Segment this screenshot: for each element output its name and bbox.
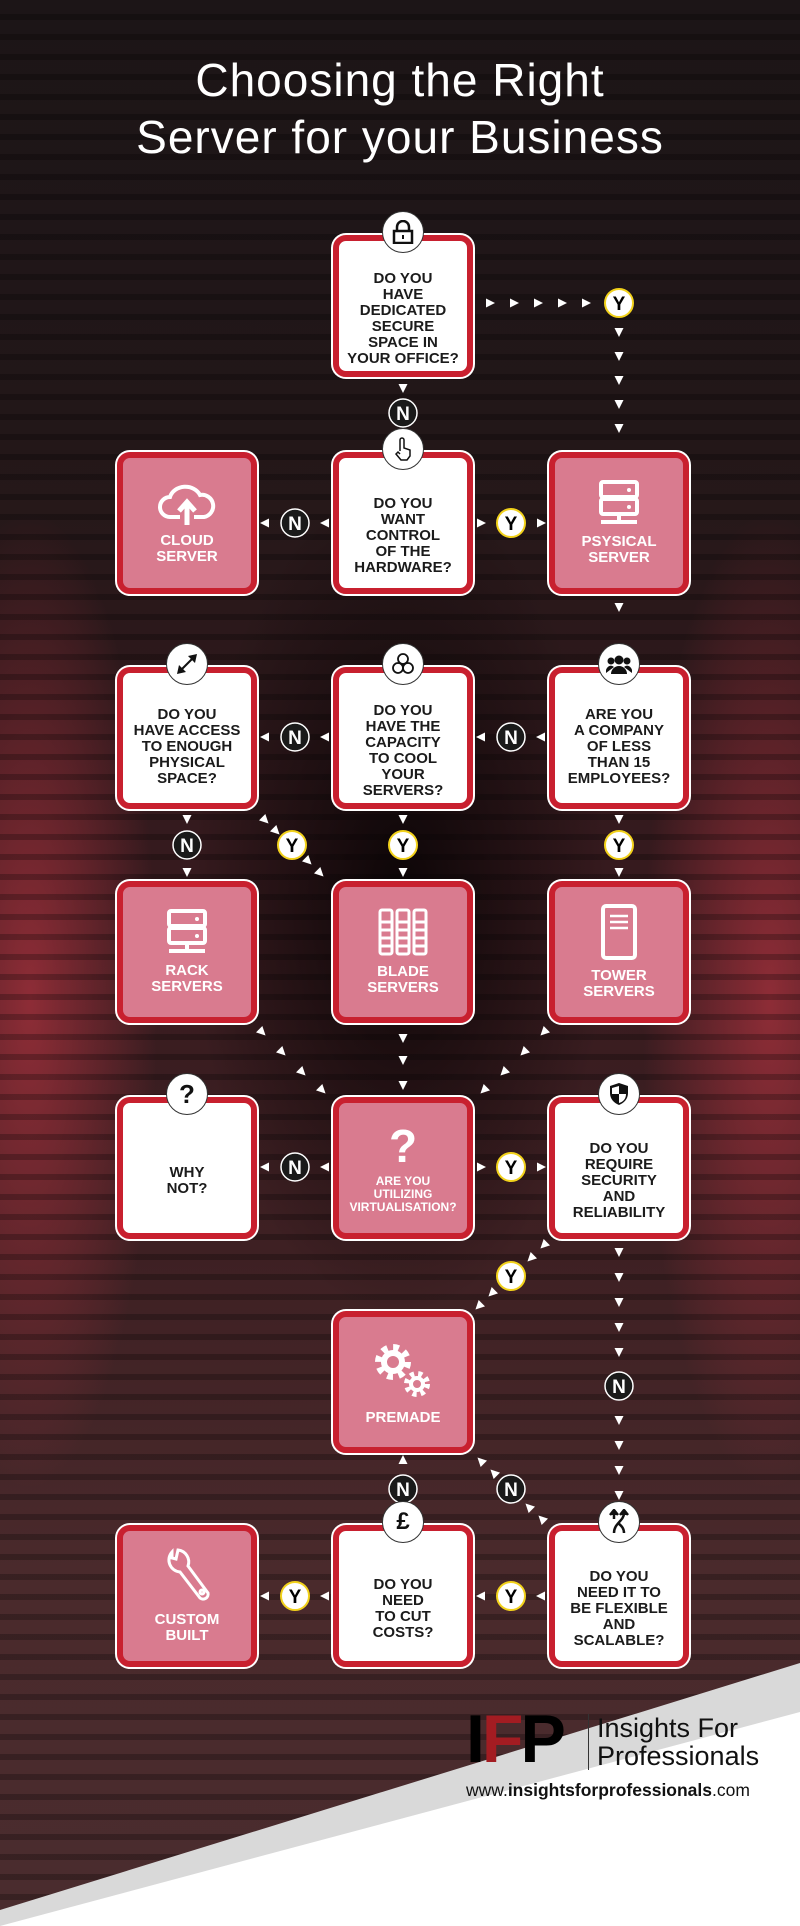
box: control of hardware: DO YOU — [374, 495, 432, 512]
box: rack servers — [117, 881, 257, 1023]
footer band — [0, 1663, 800, 1926]
box: dedicated secure space: DO YOU — [374, 270, 432, 287]
connectors: Y — [289, 1587, 302, 1608]
title — [136, 54, 664, 163]
box: company size: EMPLOYEES? — [568, 770, 670, 787]
box: tower servers — [549, 881, 689, 1023]
icon: pound sign — [382, 1501, 424, 1543]
logo text: Professionals — [597, 1741, 759, 1771]
box: control of hardware: CONTROL — [366, 527, 440, 544]
box: company size — [549, 667, 689, 809]
box: cloud server: SERVER — [156, 548, 218, 565]
connectors: N — [396, 1480, 410, 1501]
box: premade: PREMADE — [365, 1409, 440, 1426]
box: dedicated secure space: SECURE — [372, 318, 434, 335]
box: physical space: PHYSICAL — [149, 754, 225, 771]
icon: blades — [378, 908, 428, 956]
logo — [466, 1701, 759, 1800]
connectors: N — [180, 836, 194, 857]
connectors: N — [288, 1158, 302, 1179]
box: custom built — [117, 1525, 257, 1667]
box: security and reliability: REQUIRE — [585, 1156, 653, 1173]
box: physical space: DO YOU — [158, 706, 216, 723]
box: flexible and scalable — [549, 1525, 689, 1667]
box: cut costs — [333, 1525, 473, 1667]
connectors: N — [288, 728, 302, 749]
logo text — [588, 1714, 759, 1770]
box: cooling capacity: SERVERS? — [363, 782, 443, 799]
box: flexible and scalable: AND — [603, 1616, 635, 1633]
box: flexible and scalable: DO YOU — [590, 1568, 648, 1585]
box: physical server: SERVER — [588, 549, 650, 566]
box: control of hardware: OF THE — [376, 543, 430, 560]
box: cooling capacity: DO YOU — [374, 702, 432, 719]
website url: www.insightsforprofessionals.com — [466, 1780, 750, 1800]
icon: hand pointer — [382, 428, 424, 470]
box: control of hardware: HARDWARE? — [354, 559, 452, 576]
icon: padlock — [382, 211, 424, 253]
box: rack servers: RACK — [165, 962, 209, 979]
box: company size: ARE YOU — [585, 706, 653, 723]
box: physical space: HAVE ACCESS — [134, 722, 240, 739]
box: flexible and scalable: BE FLEXIBLE — [570, 1600, 668, 1617]
box: company size: A COMPANY — [574, 722, 664, 739]
box: security and reliability: AND — [603, 1188, 635, 1205]
icon: merge arrows — [598, 1501, 640, 1543]
icon: question mark: ? — [179, 1079, 195, 1109]
box: physical space: TO ENOUGH — [142, 738, 232, 755]
box: virtualisation: ARE YOU — [376, 1174, 430, 1188]
box: security and reliability: SECURITY — [581, 1172, 657, 1189]
box: cooling capacity: YOUR — [381, 766, 425, 783]
logo mark: IFP: IFP — [466, 1701, 563, 1777]
box: cooling capacity — [333, 667, 473, 809]
box: cloud server — [117, 452, 257, 594]
box: dedicated secure space: YOUR OFFICE? — [347, 350, 459, 367]
box: why not: NOT? — [167, 1180, 207, 1197]
icon: shield — [598, 1073, 640, 1115]
connectors: Y — [613, 836, 626, 857]
box: custom built: BUILT — [165, 1627, 209, 1644]
box: why not: WHY — [169, 1164, 204, 1181]
box: custom built: CUSTOM — [155, 1611, 219, 1628]
box: cut costs: TO CUT — [375, 1608, 431, 1625]
connectors: Y — [397, 836, 410, 857]
box: physical server: PSYSICAL — [581, 533, 656, 550]
box: company size: OF LESS — [587, 738, 651, 755]
logo text: Insights For — [597, 1713, 738, 1743]
box: cooling capacity: HAVE THE — [366, 718, 440, 735]
box: security and reliability: DO YOU — [590, 1140, 648, 1157]
box: cut costs: NEED — [382, 1592, 424, 1609]
icon: question mark — [166, 1073, 208, 1115]
connectors: N — [612, 1377, 626, 1398]
box: tower servers: SERVERS — [583, 983, 655, 1000]
icon: tower — [601, 904, 637, 960]
box: flexible and scalable: NEED IT TO — [577, 1584, 661, 1601]
box: security and reliability: RELIABILITY — [573, 1204, 665, 1221]
box: security and reliability — [549, 1097, 689, 1239]
box: virtualisation: UTILIZING — [374, 1186, 432, 1200]
box: physical space: SPACE? — [157, 770, 217, 787]
icon: rack server — [167, 909, 207, 953]
box: blade servers — [333, 881, 473, 1023]
box: tower servers: TOWER — [591, 967, 647, 984]
box: cooling capacity: TO COOL — [369, 750, 437, 767]
box: why not — [117, 1097, 257, 1239]
box: virtualisation: VIRTUALISATION? — [349, 1200, 457, 1214]
connectors: Y — [286, 836, 299, 857]
title: Server for your Business — [136, 111, 664, 163]
connectors: Y — [613, 294, 626, 315]
icon: people — [598, 643, 640, 685]
icon: pound sign: £ — [396, 1508, 410, 1535]
connectors: Y — [505, 514, 518, 535]
box: physical space — [117, 667, 257, 809]
title: Choosing the Right — [195, 54, 605, 106]
box: cooling capacity: CAPACITY — [365, 734, 441, 751]
icon: question mark big: ? — [389, 1120, 417, 1172]
box: cloud server: CLOUD — [160, 532, 214, 549]
box: flexible and scalable: SCALABLE? — [574, 1632, 664, 1649]
box: control of hardware: WANT — [381, 511, 425, 528]
box: cut costs: DO YOU — [374, 1576, 432, 1593]
connectors: N — [504, 1480, 518, 1501]
connectors: N — [504, 728, 518, 749]
connectors: Y — [505, 1587, 518, 1608]
icon: cloud upload — [158, 484, 216, 525]
box: premade — [333, 1311, 473, 1453]
box: dedicated secure space: SPACE IN — [368, 334, 438, 351]
connectors: Y — [505, 1267, 518, 1288]
box: control of hardware — [333, 452, 473, 594]
icon: diagonal arrow — [166, 643, 208, 685]
icon: fan — [382, 643, 424, 685]
connectors: Y — [505, 1158, 518, 1179]
box: dedicated secure space — [333, 235, 473, 377]
icon: server — [599, 480, 639, 524]
box: rack servers: SERVERS — [151, 978, 223, 995]
icon: wrench — [167, 1548, 210, 1601]
box: physical server — [549, 452, 689, 594]
box: company size: THAN 15 — [588, 754, 650, 771]
box: cut costs: COSTS? — [373, 1624, 433, 1641]
box: blade servers: BLADE — [377, 963, 429, 980]
box: dedicated secure space: HAVE — [383, 286, 423, 303]
connectors: N — [396, 404, 410, 425]
box: virtualisation — [333, 1097, 473, 1239]
box: dedicated secure space: DEDICATED — [360, 302, 446, 319]
connectors: N — [288, 514, 302, 535]
box: blade servers: SERVERS — [367, 979, 439, 996]
icon: gears — [375, 1344, 430, 1397]
